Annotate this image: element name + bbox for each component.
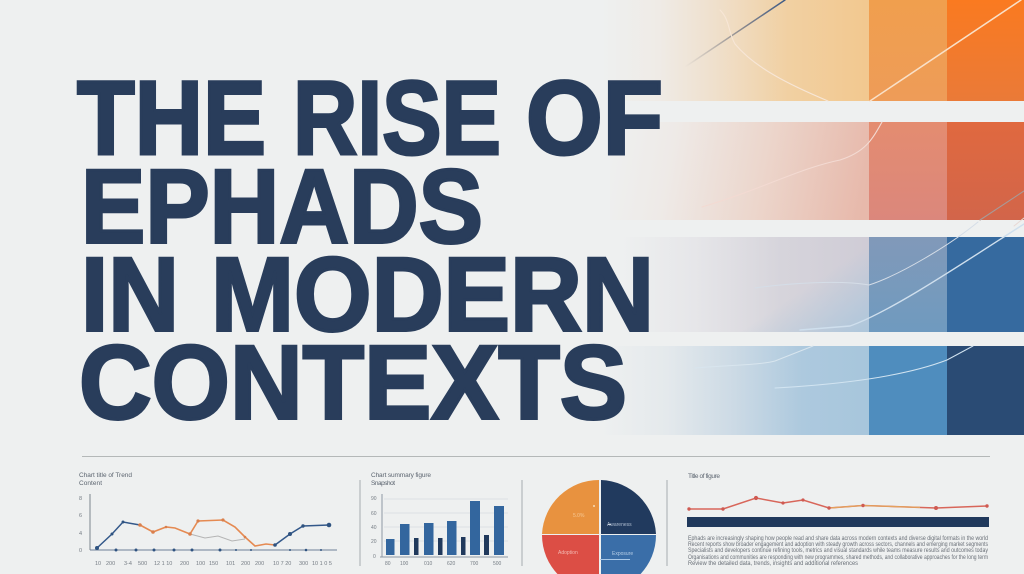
slice: orange: [542, 480, 599, 534]
red trend line: [689, 498, 987, 509]
axis labels: 0: [79, 548, 82, 554]
axis labels: [371, 496, 502, 567]
paragraph text: Specialists and developers continue refining tools, metrics and visual standards while teams measure results and outcomes today: [688, 548, 988, 554]
panel: pie chart: [542, 480, 656, 574]
title line 4: CONTEXTS: [79, 324, 627, 442]
title line 1: [77, 60, 663, 177]
axis labels: 90: [371, 496, 377, 502]
axis labels: 700: [470, 561, 479, 567]
chart heading: Chart summary figure: [371, 472, 431, 479]
title line 2: EPHADS: [81, 148, 483, 266]
separators: [360, 480, 667, 566]
blue bars: [386, 501, 504, 555]
paragraph text: [688, 536, 988, 567]
axis labels: 3-4: [124, 561, 132, 567]
axis labels: 500: [493, 561, 502, 567]
band: coral: [610, 122, 1024, 220]
axis labels: 620: [447, 561, 456, 567]
title line 3: MODERN: [211, 236, 654, 354]
panel: timeline summary: [687, 473, 989, 567]
chart heading: [79, 472, 132, 487]
blue series: [97, 522, 329, 548]
divider: [82, 456, 990, 457]
axis labels: 6: [79, 513, 82, 519]
gridlines: [384, 499, 508, 541]
axis labels: 200: [255, 561, 264, 567]
orange series: [140, 520, 275, 546]
navy bars: [414, 535, 489, 555]
axis labels: [79, 496, 332, 567]
axis labels: 200: [106, 561, 115, 567]
axes: [90, 494, 337, 550]
chart heading: Title of figure: [688, 473, 720, 480]
slice labels: Adoption: [558, 550, 578, 556]
axis labels: 8: [79, 496, 82, 502]
title line 1: RISE: [293, 60, 501, 177]
axis labels: 0: [373, 554, 376, 560]
slice: navy: [601, 480, 656, 534]
grey series: [190, 534, 245, 541]
slice labels: 5.0%: [573, 513, 585, 519]
slice labels: Awareness: [607, 522, 632, 528]
chart heading: [371, 472, 431, 487]
axis labels: 500: [138, 561, 147, 567]
axis labels: 10 7 20: [273, 561, 291, 567]
slice labels: Exposure: [612, 551, 633, 557]
axis labels: 300: [299, 561, 308, 567]
slice accents: [593, 505, 630, 560]
orange points: [138, 518, 246, 538]
orange trend segment: [829, 506, 920, 508]
decorative curved lines: [685, 0, 1024, 388]
panel: line chart: [79, 472, 337, 567]
slice: red: [542, 535, 599, 574]
axis labels: 10 1 0 5: [312, 561, 332, 567]
chart heading: Snapshot: [371, 480, 395, 487]
band: orange: [600, 0, 1024, 101]
axis labels: 4: [79, 531, 82, 537]
axis labels: 100: [400, 561, 409, 567]
axis labels: 60: [371, 511, 377, 517]
axis labels: 100: [196, 561, 205, 567]
axes: [380, 494, 508, 557]
axis labels: 40: [371, 525, 377, 531]
band: slate blue: [620, 237, 1024, 332]
axis labels: 010: [424, 561, 433, 567]
axis labels: 200: [241, 561, 250, 567]
panel: bar chart: [371, 472, 508, 567]
title line 1: OF: [526, 60, 663, 177]
slice: blue: [601, 535, 656, 574]
paragraph text: Review the detailed data, trends, insights and additional references: [688, 561, 858, 567]
chart heading: Chart title of Trend: [79, 472, 132, 479]
title line 3: IN: [81, 236, 179, 354]
axis labels: 12 1 10: [154, 561, 172, 567]
title: [77, 60, 663, 441]
axis labels: 101: [226, 561, 235, 567]
navy bar: [687, 517, 989, 527]
trend points: [687, 496, 989, 511]
axis labels: 20: [371, 539, 377, 545]
axis labels: 150: [209, 561, 218, 567]
data points: [95, 520, 331, 552]
axis labels: 10: [95, 561, 101, 567]
paragraph text: Ephads are increasingly shaping how people read and share data across modern contexts and diverse digital formats in the world: [688, 536, 988, 542]
chart heading: Content: [79, 480, 102, 487]
band: deep blue: [600, 346, 1024, 435]
panel: colour bands: [600, 0, 1024, 435]
title line 1: THE: [77, 60, 266, 177]
axis labels: 200: [180, 561, 189, 567]
axis labels: 80: [385, 561, 391, 567]
slice labels: [558, 513, 633, 557]
